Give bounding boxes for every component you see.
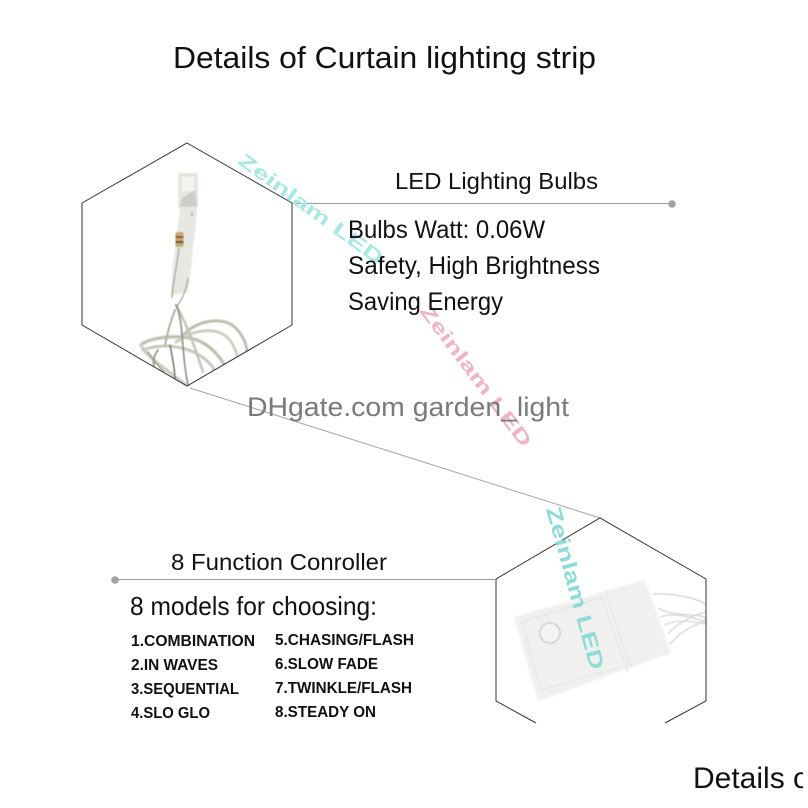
- list: functions column 2: 6.SLOW FADE: [275, 656, 378, 673]
- list: functions column 2: 8.STEADY ON: [275, 704, 376, 721]
- title: Details of Curtain lighting strip: [173, 40, 596, 75]
- text block: bulb features: [348, 216, 600, 316]
- watermark: pink centre: Zeinlam LED: [415, 301, 535, 451]
- list: functions column 1: 4.SLO GLO: [131, 705, 210, 722]
- text block: 8 models heading: 8 models for choosing:: [130, 591, 377, 621]
- hexagon outline: [496, 518, 706, 723]
- wire coils: [141, 305, 247, 386]
- panel: LED bulb hexagon: [82, 143, 292, 386]
- sleeve wires: [172, 212, 192, 306]
- bulb head: [178, 173, 198, 208]
- photo: LED bulb and wire: [141, 173, 247, 386]
- text block: bulb features: Saving Energy: [348, 288, 503, 316]
- controller wires: [653, 594, 706, 644]
- watermark: DHgate store: DHgate.com garden_light: [247, 392, 570, 422]
- watermark: cyan upper: Zeinlam LED: [234, 150, 387, 269]
- heading: 8 Function Conroller: 8 Function Conroller: [171, 549, 387, 575]
- list: functions column 1: 2.IN WAVES: [131, 657, 218, 674]
- hexagon outline: [82, 143, 292, 386]
- list: functions column 2: 5.CHASING/FLASH: [275, 632, 414, 649]
- photo: controller box: [514, 580, 706, 701]
- list: functions column 1: 3.SEQUENTIAL: [131, 681, 239, 698]
- list: functions column 1: [131, 633, 255, 722]
- list: functions column 2: [275, 632, 414, 721]
- connector line between hexagons: [190, 388, 600, 518]
- heading: LED Lighting Bulbs: LED Lighting Bulbs: [395, 168, 598, 194]
- watermark: cyan lower: Zeinlam LED: [541, 504, 608, 672]
- callout line: controller: [111, 576, 496, 584]
- text block: bulb features: Bulbs Watt: 0.06W: [348, 216, 545, 244]
- controller seams and button: [522, 590, 631, 690]
- panel: controller hexagon: [496, 518, 706, 723]
- list: functions column 1: 1.COMBINATION: [131, 633, 255, 650]
- list: functions column 2: 7.TWINKLE/FLASH: [275, 680, 412, 697]
- callout line: bulbs: [292, 200, 676, 208]
- controller body: [514, 580, 671, 701]
- resistor: [176, 232, 184, 247]
- bulb sleeve: [171, 207, 197, 296]
- text block: bulb features: Safety, High Brightness: [348, 252, 600, 280]
